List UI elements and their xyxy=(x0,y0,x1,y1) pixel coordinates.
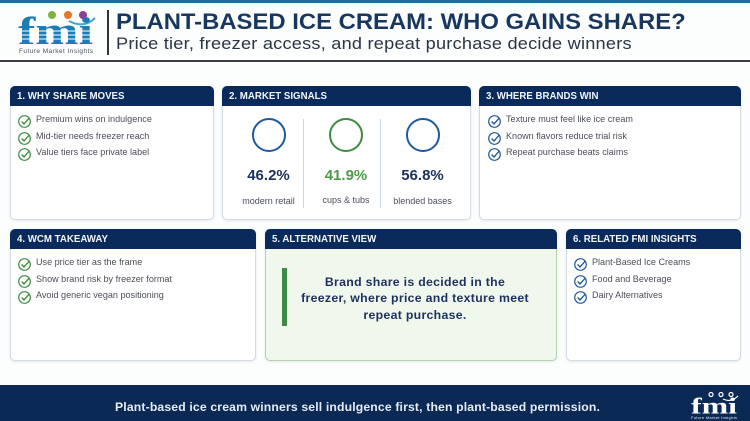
heading: market signals: 2. MARKET SIGNALS xyxy=(229,91,327,102)
heading: why share moves xyxy=(10,86,214,106)
footer banner xyxy=(0,385,750,421)
title: PLANT-BASED ICE CREAM: WHO GAINS SHARE? xyxy=(116,8,686,34)
heading: WCM takeaway xyxy=(10,229,256,249)
item: premium xyxy=(18,114,152,128)
logo: Future Market Insights: Future Market Insights xyxy=(19,48,94,55)
stat: 56.8% xyxy=(401,167,444,184)
stat label: modern retail xyxy=(242,196,295,206)
heading: where brands win xyxy=(479,86,741,106)
header rule xyxy=(0,60,750,62)
callout text: Brand share is decided in the xyxy=(325,274,505,288)
footer logo: Future Market Insights xyxy=(691,415,737,420)
panel: related FMI insights xyxy=(566,229,741,361)
heading: why share moves: 1. WHY SHARE MOVES xyxy=(17,91,124,102)
heading: related FMI insights xyxy=(566,229,741,249)
heading: alternative view xyxy=(265,229,557,249)
item: dairy alternatives: Dairy Alternatives xyxy=(592,290,663,300)
item: plant-based ice creams xyxy=(574,257,690,271)
item: value xyxy=(18,147,149,161)
item: repeat purchase: Repeat purchase beats claims xyxy=(506,147,628,157)
item: generic vegan xyxy=(18,290,164,304)
list: share drivers xyxy=(18,114,152,161)
ring icon xyxy=(406,118,440,152)
item: flavors xyxy=(488,130,627,145)
list: takeaways xyxy=(18,257,172,304)
item: price tier: Use price tier as the frame xyxy=(36,257,142,267)
footer logo xyxy=(691,392,738,420)
heading: WCM takeaway: 4. WCM TAKEAWAY xyxy=(17,234,108,245)
panel: WCM takeaway xyxy=(10,229,256,361)
list: brand factors xyxy=(488,114,633,161)
item: premium: Premium wins on indulgence xyxy=(36,114,152,124)
ring icon xyxy=(329,118,363,152)
logo: Future Market Insights xyxy=(18,10,96,55)
heading: alternative view: 5. ALTERNATIVE VIEW xyxy=(272,234,376,245)
signal: cups and tubs xyxy=(322,118,370,205)
stat label: cups & tubs xyxy=(322,195,370,205)
panel: alternative view xyxy=(265,229,557,361)
item: flavors: Known flavors reduce trial risk xyxy=(506,130,627,140)
callout text: freezer, where price and texture meet xyxy=(301,291,529,305)
item: texture xyxy=(488,114,633,128)
heading: market signals xyxy=(222,86,471,106)
item: plant-based ice creams: Plant-Based Ice Creams xyxy=(592,257,690,267)
signal: modern retail xyxy=(242,118,295,206)
stat: 46.2% xyxy=(247,167,290,184)
heading: related FMI insights: 6. RELATED FMI INSIGHTS xyxy=(573,234,697,245)
item: mid-tier xyxy=(18,130,149,145)
item: brand risk xyxy=(18,274,172,288)
footer logo: fmi xyxy=(691,394,738,418)
item: brand risk: Show brand risk by freezer format xyxy=(36,274,172,284)
stat label: blended bases xyxy=(393,196,452,206)
item: food and beverage xyxy=(574,274,672,288)
stat: 41.9% xyxy=(325,167,367,184)
callout text xyxy=(301,274,529,322)
panel: where brands win xyxy=(479,86,741,220)
header divider xyxy=(107,10,108,55)
panel: market signals xyxy=(222,86,471,220)
callout text: repeat purchase. xyxy=(363,308,467,322)
item: generic vegan: Avoid generic vegan positioning xyxy=(36,290,164,300)
item: food and beverage: Food and Beverage xyxy=(592,274,672,284)
item: repeat purchase xyxy=(488,147,628,161)
item: dairy alternatives xyxy=(574,290,663,304)
accent bar xyxy=(282,268,287,326)
item: price tier xyxy=(18,257,142,271)
subtitle: Price tier, freezer access, and repeat purchase decide winners xyxy=(116,34,632,53)
footer message: Plant-based ice cream winners sell indulgence first, then plant-based permission. xyxy=(115,400,600,414)
item: mid-tier: Mid-tier needs freezer reach xyxy=(36,130,149,140)
item: texture: Texture must feel like ice cream xyxy=(506,114,633,124)
ring icon xyxy=(252,118,286,152)
signal: blended bases xyxy=(393,118,452,206)
top accent bar xyxy=(0,0,750,3)
list: related reports xyxy=(574,257,690,304)
item: value: Value tiers face private label xyxy=(36,147,149,157)
logo: Future Market Insights: fmi xyxy=(18,10,93,53)
panel: why share moves xyxy=(10,86,214,220)
heading: where brands win: 3. WHERE BRANDS WIN xyxy=(486,91,598,102)
